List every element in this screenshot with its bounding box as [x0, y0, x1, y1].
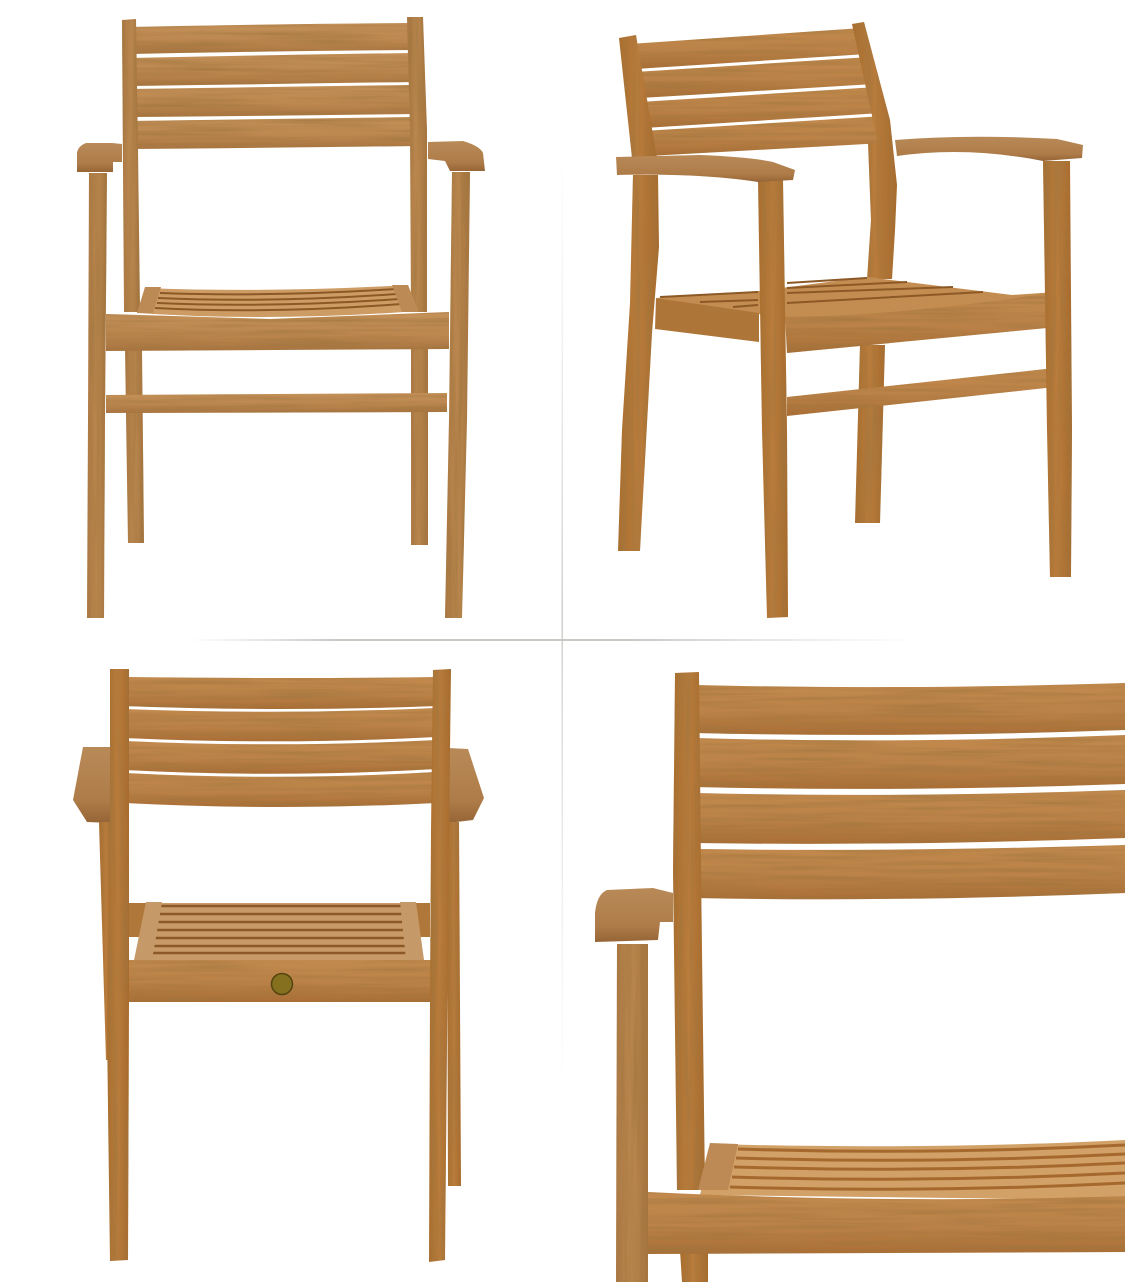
seat front rail	[647, 1192, 1125, 1254]
panel: three-quarter view of chair	[616, 22, 1083, 618]
far legs	[99, 822, 461, 1186]
seat rail	[128, 960, 431, 1002]
backrest slats	[125, 677, 436, 807]
seat	[128, 902, 430, 960]
armrest	[595, 888, 673, 942]
armrests	[616, 137, 1083, 182]
seat front rail, stretcher	[785, 292, 1057, 416]
seat	[655, 277, 1056, 342]
rear legs	[125, 348, 428, 545]
back posts and legs	[107, 669, 451, 1262]
backrest slats	[130, 23, 414, 149]
front legs	[758, 161, 1072, 618]
armrests	[73, 747, 484, 823]
back posts	[618, 22, 897, 551]
panel dividers	[190, 140, 920, 1100]
backrest slats	[630, 28, 884, 156]
back posts	[122, 17, 427, 312]
panel: rear view of chair	[73, 669, 484, 1262]
seat front rail and stretcher	[106, 312, 449, 413]
panel: front view of chair	[77, 17, 485, 618]
seat	[698, 1140, 1125, 1200]
brass badge	[272, 974, 292, 994]
front leg	[616, 944, 648, 1282]
rear right lower leg	[855, 345, 885, 523]
front legs	[87, 172, 470, 618]
backrest slats	[695, 683, 1125, 899]
panel: close-up of backrest and seat	[595, 672, 1125, 1282]
back post	[673, 672, 708, 1282]
seat slats	[137, 285, 418, 317]
armrests	[77, 141, 485, 172]
